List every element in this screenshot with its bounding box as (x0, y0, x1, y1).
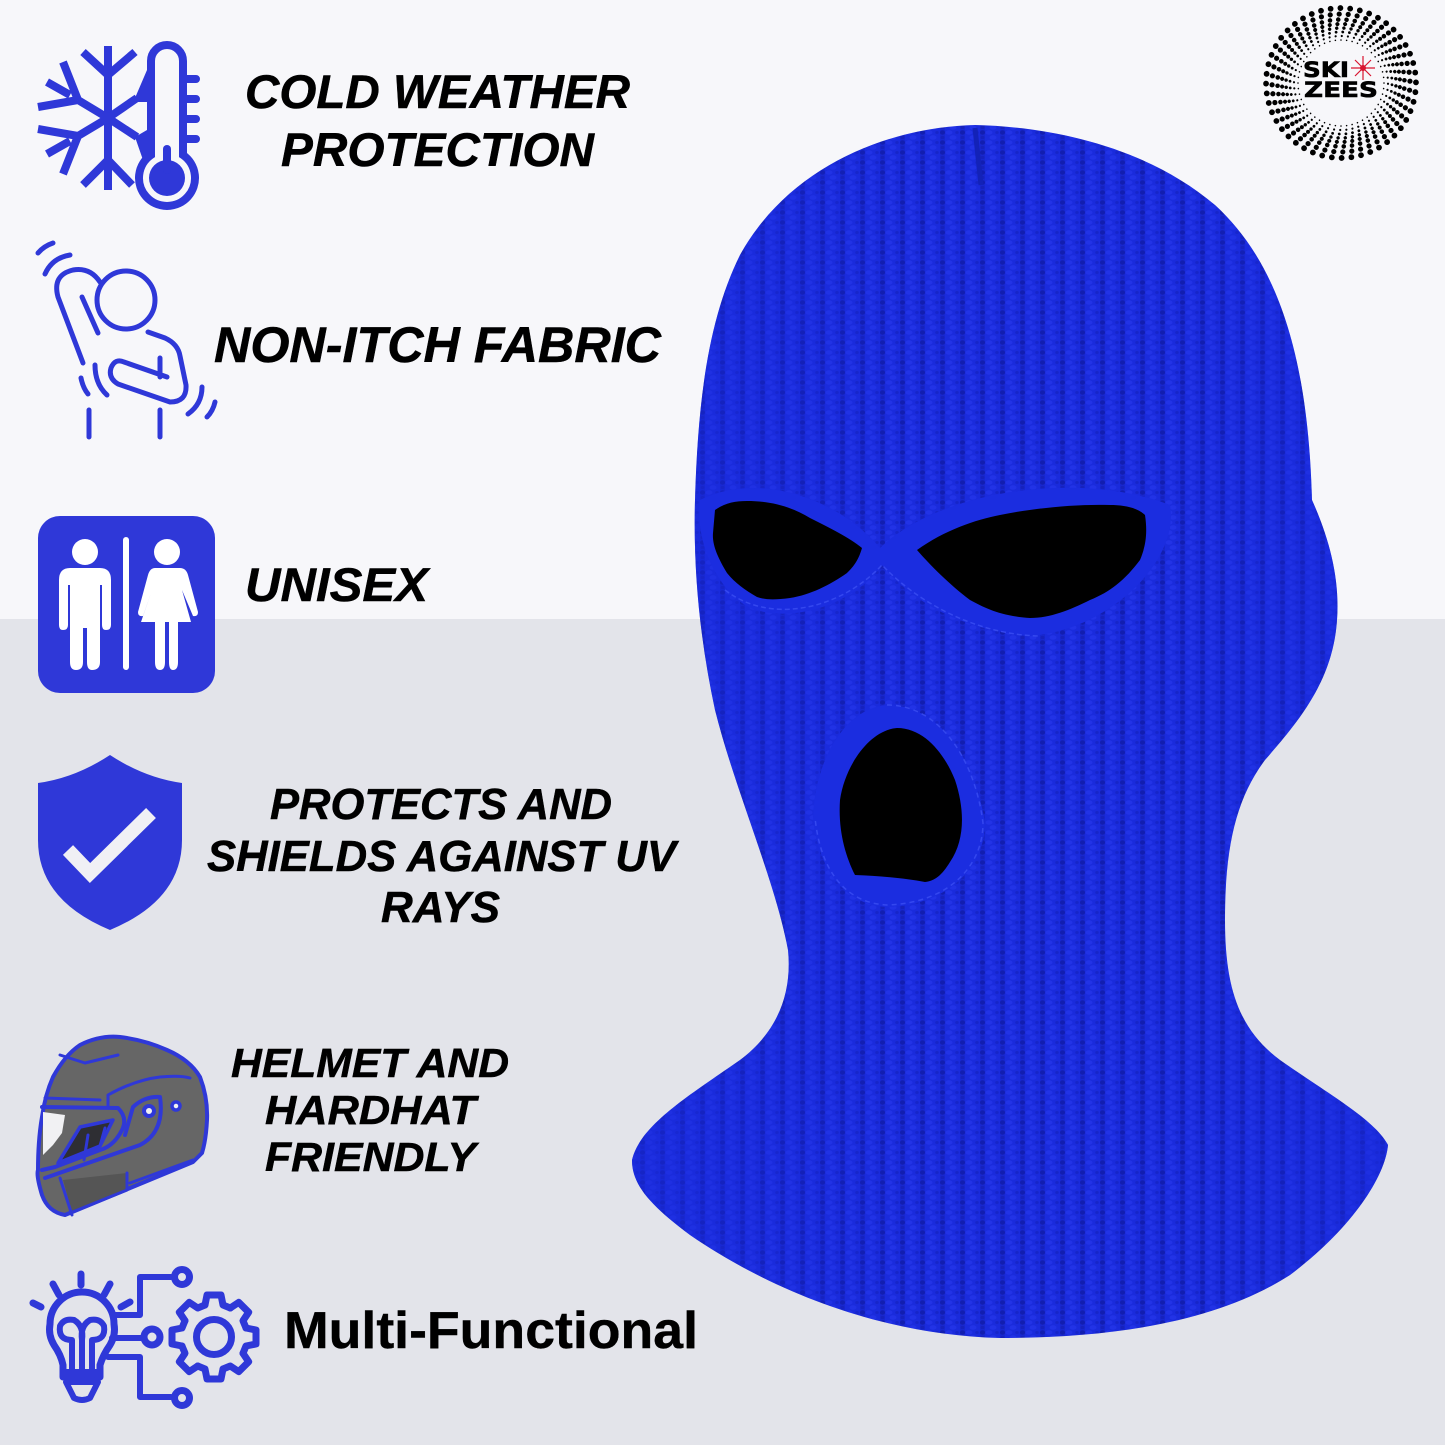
icon: shield with check mark (38, 755, 182, 930)
icon: unisex restroom sign (38, 516, 215, 693)
heading: non-itch fabric: NON-ITCH FABRIC (214, 317, 662, 373)
heading: protects and shields against uv rays: SHIELDS AGAINST UV (207, 832, 680, 881)
heading: protects and shields against uv rays: RAYS (381, 883, 500, 932)
heading: helmet and hardhat friendly: HELMET AND (231, 1040, 509, 1086)
mouth opening (840, 728, 962, 882)
right eye opening (917, 505, 1146, 618)
logo star (1351, 56, 1375, 80)
logo: Ski Zees dotted spiral (1230, 0, 1445, 182)
mouth rim (813, 705, 985, 907)
eye rims (699, 488, 1171, 636)
icon: person scratching itch (38, 243, 215, 437)
heading: protects and shields against uv rays (207, 780, 680, 932)
heading: helmet and hardhat friendly (231, 1040, 509, 1180)
heading: protects and shields against uv rays: PROTECTS AND (270, 780, 612, 829)
product photo: blue three-hole balaclava (632, 125, 1388, 1338)
heading: helmet and hardhat friendly: HARDHAT (265, 1087, 479, 1133)
heading: cold weather protection (245, 65, 630, 176)
eye rim stitching (725, 565, 1040, 636)
background: upper light band (0, 0, 1445, 619)
icon: motorcycle helmet (38, 1037, 207, 1215)
heading: cold weather protection: PROTECTION (281, 123, 595, 176)
logo dots ring (1230, 0, 1445, 182)
background: lower grey band (0, 619, 1445, 1445)
icon: snowflake and thermometer (38, 45, 196, 206)
mask silhouette (632, 125, 1388, 1338)
left eye opening (713, 501, 862, 599)
heading: multi-functional: Multi-Functional (284, 1302, 698, 1360)
mask soft shading (632, 125, 1388, 1338)
heading: cold weather protection: COLD WEATHER (245, 65, 630, 118)
logo word: ski: SKI (1303, 58, 1349, 82)
top seam (975, 128, 981, 185)
logo word: zees: ZEES (1304, 78, 1378, 102)
icon: lightbulb connected to gear (33, 1270, 256, 1406)
mouth rim stitching (815, 705, 983, 905)
heading: unisex: UNISEX (245, 558, 431, 611)
heading: helmet and hardhat friendly: FRIENDLY (265, 1134, 480, 1180)
